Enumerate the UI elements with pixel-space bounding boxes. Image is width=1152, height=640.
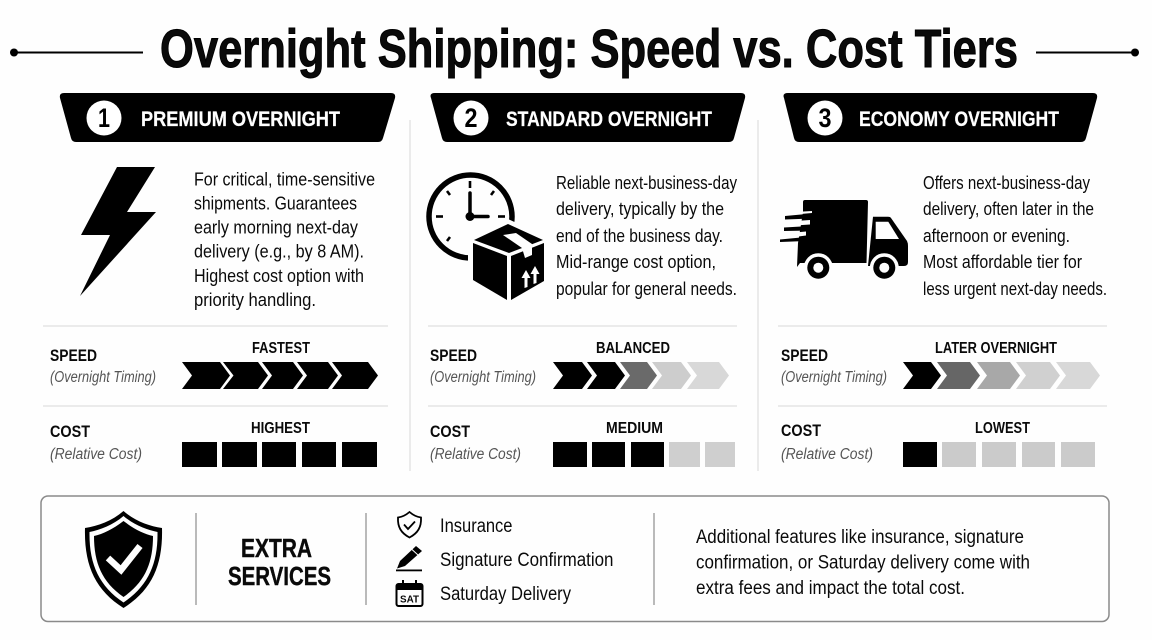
icon: saturday calendar: SAT — [400, 594, 420, 606]
description 2 — [556, 173, 737, 299]
cost label 1: (Relative Cost) — [50, 446, 142, 463]
description 1: early morning next-day — [194, 218, 358, 238]
header banner 1: PREMIUM OVERNIGHT — [141, 108, 340, 131]
icon: delivery truck — [780, 200, 908, 282]
panel: extra services — [41, 496, 1109, 622]
item: insurance: Insurance — [440, 516, 512, 537]
speed label 3: (Overnight Timing) — [781, 369, 887, 386]
speed value: fastest: FASTEST — [252, 340, 310, 357]
cost label 3: COST — [781, 421, 822, 440]
speed value: balanced: BALANCED — [596, 340, 670, 357]
description 1 — [194, 170, 375, 310]
heading: extra services: EXTRA — [241, 533, 312, 563]
description 1: shipments. Guarantees — [194, 194, 357, 214]
description 3: afternoon or evening. — [923, 226, 1070, 246]
note: extra fees: confirmation, or Saturday delivery come with — [696, 552, 1030, 574]
header banner 1: 1 — [98, 103, 110, 133]
title ornament: left line — [10, 48, 143, 56]
cost squares 1 — [182, 442, 377, 467]
speed chevrons 3 — [903, 362, 1100, 389]
icon: clock and box — [429, 175, 549, 305]
header banner 3: ECONOMY OVERNIGHT — [859, 108, 1059, 131]
cost label 3 — [781, 421, 873, 463]
heading: extra services: SERVICES — [228, 561, 331, 591]
icon: lightning bolt — [80, 167, 156, 296]
speed label 1: (Overnight Timing) — [50, 369, 156, 386]
heading: extra services — [228, 533, 331, 591]
header banner 2 — [430, 93, 745, 142]
speed label 2: (Overnight Timing) — [430, 369, 536, 386]
description 1: Highest cost option with — [194, 266, 364, 286]
speed label 1 — [50, 346, 156, 386]
panel: premium overnight — [50, 93, 395, 467]
speed chevrons 1 — [182, 362, 378, 389]
header banner 1 — [60, 93, 395, 142]
cost squares 2 — [553, 442, 735, 467]
title ornament: right line — [1036, 48, 1139, 56]
speed label 2 — [430, 346, 536, 386]
cost value: highest: HIGHEST — [251, 420, 310, 437]
cost value: lowest: LOWEST — [975, 420, 1030, 437]
speed label 3: SPEED — [781, 346, 828, 365]
note: extra fees: Additional features like insurance, signature — [696, 527, 1024, 548]
icon: small shield — [398, 512, 421, 538]
description 2: Mid-range cost option, — [556, 252, 716, 272]
header banner 2: STANDARD OVERNIGHT — [506, 108, 712, 131]
item: saturday delivery: Saturday Delivery — [440, 584, 571, 605]
description 2: end of the business day. — [556, 226, 723, 246]
description 3: delivery, often later in the — [923, 199, 1094, 219]
description 2: Reliable next-business-day — [556, 173, 737, 193]
cost label 2: (Relative Cost) — [430, 446, 521, 463]
header banner 3 — [784, 93, 1097, 142]
cost label 1 — [50, 422, 142, 463]
cost label 1: COST — [50, 422, 91, 441]
speed label 2: SPEED — [430, 346, 477, 365]
note: extra fees — [696, 527, 1030, 599]
item: signature confirmation: Signature Confirmation — [440, 550, 614, 571]
speed value: later overnight: LATER OVERNIGHT — [935, 340, 1057, 357]
note: extra fees: extra fees and impact the total cost. — [696, 578, 965, 599]
description 1: priority handling. — [194, 290, 316, 310]
description 3: Most affordable tier for — [923, 252, 1082, 272]
speed chevrons 2 — [553, 362, 729, 389]
description 1: delivery (e.g., by 8 AM). — [194, 242, 364, 262]
description 1: For critical, time-sensitive — [194, 170, 375, 190]
description 2: popular for general needs. — [556, 279, 737, 299]
icon: pen — [396, 546, 422, 571]
panel: standard overnight — [429, 93, 745, 467]
panel: economy overnight — [780, 93, 1107, 467]
icon: saturday calendar — [396, 580, 422, 606]
cost value: medium: MEDIUM — [606, 420, 663, 437]
description 3: Offers next-business-day — [923, 173, 1090, 193]
cost squares 3 — [903, 442, 1095, 467]
header banner 3: 3 — [818, 103, 832, 133]
cost label 3: (Relative Cost) — [781, 446, 873, 463]
speed label 3 — [781, 346, 887, 386]
description 3 — [923, 173, 1107, 299]
description 3: less urgent next-day needs. — [923, 279, 1107, 299]
cost label 2 — [430, 422, 521, 463]
description 2: delivery, typically by the — [556, 199, 724, 219]
header banner 2: 2 — [464, 103, 478, 133]
cost label 2: COST — [430, 422, 471, 441]
speed label 1: SPEED — [50, 346, 97, 365]
icon: large shield with check — [85, 511, 162, 608]
